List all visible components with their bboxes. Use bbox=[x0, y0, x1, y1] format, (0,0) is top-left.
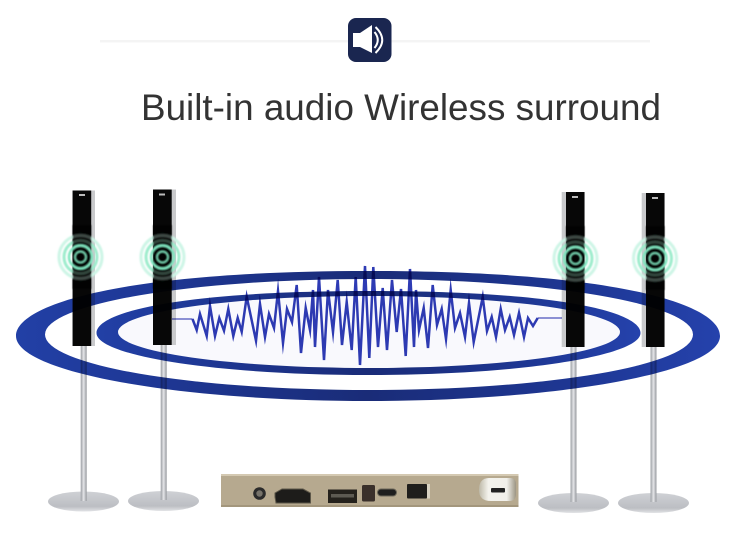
soft inner haze of the rings bbox=[118, 296, 620, 368]
projector port panel bbox=[221, 474, 518, 507]
speaker 1 bbox=[72, 190, 95, 346]
device body bbox=[221, 474, 518, 507]
speaker stands bbox=[48, 345, 689, 513]
USB port bbox=[328, 490, 357, 503]
stand 4 bbox=[618, 346, 689, 513]
square button bbox=[362, 485, 375, 502]
audio jack bbox=[253, 487, 266, 500]
sound pulses bbox=[59, 225, 676, 290]
inner blue surround ring bbox=[96, 291, 640, 375]
stand 3 bbox=[538, 346, 609, 513]
white pill connector bbox=[479, 478, 516, 501]
header divider line bbox=[100, 40, 650, 42]
outer blue surround ring bbox=[16, 271, 720, 401]
audio waveform bbox=[172, 266, 562, 365]
HDMI port bbox=[275, 489, 310, 503]
speaker towers bbox=[72, 190, 665, 347]
stand 2 bbox=[128, 345, 199, 511]
power switch bbox=[407, 484, 430, 498]
micro USB port bbox=[378, 489, 396, 496]
speaker 4 bbox=[642, 193, 665, 347]
pulse: speaker 2 bbox=[141, 225, 184, 289]
pulse: speaker 3 bbox=[554, 226, 597, 290]
icon: speaker badge bbox=[348, 18, 392, 62]
title: Built-in audio Wireless surround bbox=[141, 86, 661, 128]
stand 1 bbox=[48, 345, 119, 512]
pulse: speaker 4 bbox=[634, 226, 676, 290]
speaker 2 bbox=[153, 190, 176, 345]
pulse: speaker 1 bbox=[59, 225, 102, 289]
speaker 3 bbox=[562, 192, 585, 347]
